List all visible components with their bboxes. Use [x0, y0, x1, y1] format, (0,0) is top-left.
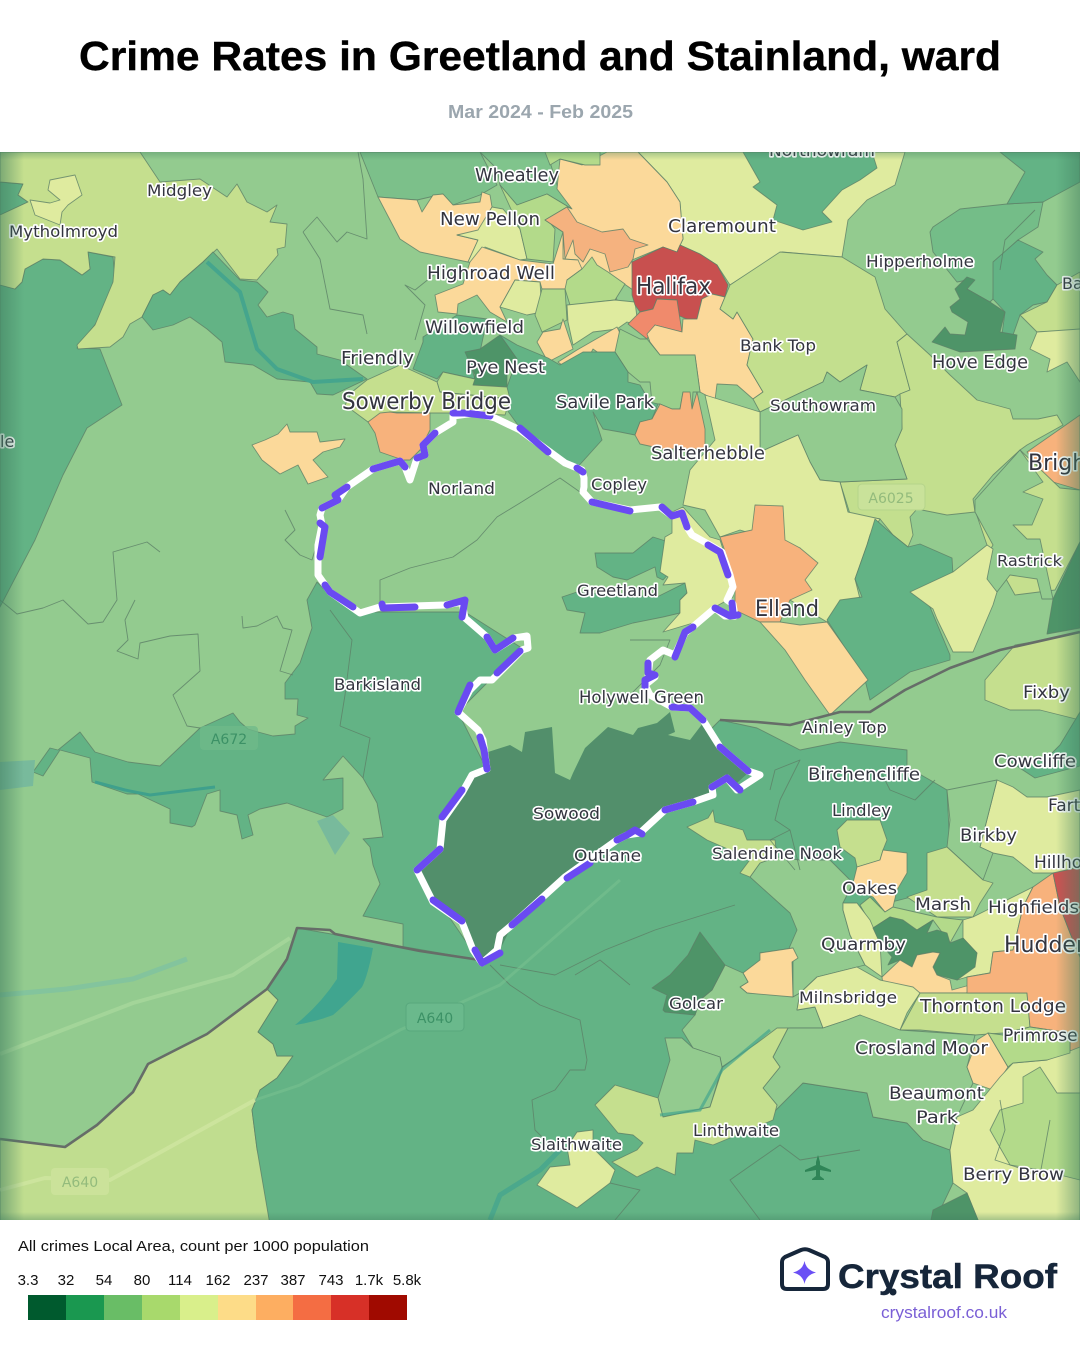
county boundary	[0, 632, 1080, 1147]
road shield: A640 centre	[406, 1003, 464, 1031]
road: A640 south-west	[0, 1100, 255, 1190]
place labels: Midgley	[147, 181, 212, 200]
region: Calder valley strip	[142, 252, 367, 395]
water: Scammonden reservoir	[295, 942, 373, 1025]
region: Elland south pale orange	[760, 622, 868, 715]
icon: airport plane	[805, 1155, 831, 1180]
region: southern darkest	[930, 1193, 980, 1225]
region: Milnsbridge pale	[797, 967, 920, 1030]
river: Colne	[490, 1150, 560, 1220]
region: Berry Brow east green	[990, 1067, 1080, 1180]
wordmark: Crystal Roof	[838, 1258, 1058, 1296]
region: central Halifax block	[535, 289, 567, 332]
region: Claremount pale yellow	[638, 152, 905, 285]
region: Pye Nest yellow-green	[437, 372, 510, 399]
place labels: Primrose	[1003, 1026, 1078, 1046]
region: Halifax salmon	[628, 299, 682, 339]
legend values: 54	[96, 1272, 112, 1289]
river: Colne east	[660, 1030, 770, 1115]
region: north of New Pellon	[360, 152, 497, 205]
place labels: Cowcliffe	[994, 752, 1076, 772]
region: Thornton Lodge pale orange	[882, 952, 970, 993]
region: north-west dark corner	[0, 182, 28, 215]
region: Barkisland and Ripponden dark	[33, 582, 525, 962]
region: Highfields pale	[957, 887, 1033, 980]
subtitle: date range: Mar 2024 - Feb 2025	[448, 101, 633, 122]
region: Northowram dark	[743, 152, 877, 230]
region: pale orange King Cross	[558, 326, 620, 364]
region: Salendine east green	[750, 857, 865, 997]
ward boundary: Greetland and Stainland	[318, 413, 760, 963]
place labels: le	[0, 432, 14, 451]
region: Highroad Well	[435, 232, 582, 322]
legend values	[18, 1272, 422, 1289]
place labels: Barkisland	[334, 675, 421, 694]
region: Berry Brow pale	[950, 1047, 1080, 1225]
region: Golcar darkest	[652, 932, 725, 1015]
legend values: 3.3	[18, 1272, 38, 1289]
road shield: A672: A672	[211, 732, 247, 748]
place labels: Pye Nest	[466, 358, 545, 378]
place labels: Beaumont	[889, 1084, 984, 1104]
region: Huddersfield east pale	[900, 993, 1030, 1035]
region: Elland north pale	[683, 395, 880, 622]
region: Rastrick pale	[910, 545, 997, 652]
place labels: Salterhebble	[651, 443, 765, 464]
place labels: Savile Park	[556, 393, 655, 413]
place labels: Birchencliffe	[808, 765, 920, 785]
place labels: Sowerby Bridge	[342, 389, 511, 415]
region: Crosland Moor pale orange	[967, 1033, 1008, 1090]
place labels: Marsh	[915, 895, 971, 915]
legend values: 1.7k	[355, 1272, 384, 1289]
river: Calder	[207, 262, 363, 382]
place labels: Slaithwaite	[531, 1135, 622, 1154]
region: Pye Nest darkest	[465, 335, 517, 387]
place labels: Fixby	[1023, 683, 1070, 703]
place labels	[0, 141, 1080, 1185]
region boundaries	[0, 152, 1050, 1220]
website url: crystalroof.co.uk	[881, 1304, 1008, 1322]
region: west pale-orange patch	[252, 424, 345, 484]
place labels: Berry Brow	[963, 1165, 1064, 1185]
region: Greetland dark north	[595, 537, 672, 580]
region: Elland east dark	[827, 519, 953, 700]
region: Greetland dark south	[562, 583, 687, 633]
region: Quarmby pale	[843, 903, 882, 977]
region: Bank Top pale orange	[647, 294, 763, 400]
place labels: Copley	[591, 475, 647, 494]
place labels: Thornton Lodge	[919, 996, 1066, 1017]
place labels: Claremount	[668, 217, 776, 237]
place labels: Golcar	[669, 994, 723, 1013]
region: Golcar green	[682, 965, 823, 1067]
icon: house with star	[782, 1249, 828, 1289]
region: Hove Edge east dark	[993, 240, 1057, 335]
place labels: Norland	[428, 479, 495, 498]
region: east yellow-green plain	[840, 334, 1063, 547]
region: Primrose green	[988, 1027, 1070, 1067]
legend title: All crimes Local Area, count per 1000 population	[18, 1238, 369, 1255]
place labels: Park	[916, 1108, 958, 1128]
water: west reservoir	[0, 760, 35, 790]
place labels: Willowfield	[425, 318, 524, 338]
road shield: A640 south-west: A640	[62, 1175, 98, 1191]
region: north Halifax pale orange	[545, 152, 683, 300]
region: Marsh south green	[860, 897, 963, 943]
region: Golcar south green	[658, 1038, 722, 1117]
legend values: 5.8k	[393, 1272, 422, 1289]
place labels: Elland	[755, 597, 819, 622]
road shield: A6025: A6025	[868, 491, 914, 507]
place labels: New Pellon	[440, 210, 540, 230]
place labels: Wheatley	[475, 165, 559, 186]
region: Bailiff Bridge yellow-green	[1020, 272, 1080, 332]
legend values: 237	[243, 1272, 269, 1289]
region: top small patches	[545, 152, 600, 165]
region: central Halifax pale	[567, 300, 638, 345]
region: Southowram	[760, 365, 907, 482]
legend values: 743	[318, 1272, 344, 1289]
region: Claremount orange	[545, 207, 648, 272]
region: Linthwaite	[595, 1028, 788, 1177]
region: central Halifax west	[565, 257, 625, 305]
place labels: Highroad Well	[427, 263, 555, 284]
place labels: Salendine Nook	[712, 844, 843, 863]
region: Huddersfield orange	[967, 873, 1080, 1053]
place labels: Oakes	[842, 879, 897, 899]
place labels: Mytholmroyd	[9, 222, 118, 241]
region: Crosland Moor green	[763, 1015, 975, 1150]
river: Ryburn	[95, 782, 215, 795]
region: Birkby green	[947, 780, 997, 880]
region: Farnley and Birkby pale	[980, 780, 1080, 873]
region: Salterhebble orange	[635, 392, 705, 449]
place labels: Halifax	[636, 274, 711, 300]
region: Oakes pale orange	[853, 850, 907, 912]
region: western dark moor	[0, 252, 122, 607]
legend	[18, 1238, 422, 1320]
legend values: 80	[134, 1272, 150, 1289]
region: Rastrick north	[975, 450, 1080, 595]
region: New Pellon pale	[457, 207, 527, 264]
region: Highroad Well pale	[500, 280, 542, 315]
place labels: Crosland Moor	[855, 1038, 989, 1059]
region: Hipperholme mid	[930, 202, 1043, 302]
region: Savile Park dark	[500, 335, 658, 470]
region: Fixby pale	[985, 632, 1080, 720]
road shield: A6025	[858, 484, 925, 510]
region: Huddersfield centre red	[1053, 867, 1080, 957]
region: Mytholmroyd pale centre	[30, 175, 82, 225]
region: Golcar pale orange	[740, 948, 798, 998]
place labels: Ainley Top	[802, 718, 887, 737]
region: Lindley yellow-green	[837, 820, 887, 867]
place labels: Rastrick	[997, 552, 1062, 570]
region: Willowfield dark	[413, 315, 487, 379]
place labels: Friendly	[341, 348, 414, 369]
legend colour scale	[28, 1295, 407, 1320]
legend values: 114	[168, 1272, 192, 1289]
place labels: Sowood	[533, 804, 600, 823]
region: Marsh yellow-green	[907, 847, 993, 917]
road shield: A640 centre: A640	[417, 1011, 453, 1027]
region: New Pellon	[378, 192, 492, 262]
region: Hove Edge darkest	[932, 277, 1017, 352]
place labels: Bank Top	[740, 336, 816, 355]
region: Cowcliffe dark	[1000, 712, 1080, 778]
region: Hove Edge east pale	[1030, 329, 1080, 382]
region: north-east dark	[1000, 152, 1080, 204]
legend values: 162	[205, 1272, 231, 1289]
region: Midgley and Mytholmroyd	[0, 152, 287, 349]
region: Salendine Nook yellow-green	[687, 810, 777, 877]
place labels: Milnsbridge	[799, 988, 897, 1007]
legend values: 32	[58, 1272, 74, 1289]
place labels: Lindley	[832, 801, 891, 820]
logo: Crystal Roof	[782, 1249, 1058, 1322]
region: Sowood darkest	[417, 712, 748, 963]
map edge fade	[0, 152, 1080, 1220]
water: stream	[0, 959, 187, 995]
region: Slaithwaite pale	[537, 1130, 615, 1208]
region: Rastrick green	[975, 450, 1053, 599]
region: Elland orange	[720, 505, 818, 622]
place labels: Hove Edge	[932, 352, 1028, 373]
place labels: Outlane	[574, 846, 641, 865]
region: south central dark	[252, 720, 953, 1225]
place labels: Greetland	[577, 581, 658, 600]
place labels: Birkby	[960, 826, 1017, 846]
region: west Halifax green	[615, 329, 700, 409]
road: M62 east	[255, 880, 620, 1100]
place labels: Highfields	[988, 898, 1079, 918]
road: M62 west	[0, 938, 290, 1054]
legend values: 387	[280, 1272, 306, 1289]
region: Quarmby darkest	[873, 917, 977, 980]
ward outline white	[318, 413, 760, 963]
place labels: Linthwaite	[693, 1121, 779, 1140]
place labels: Quarmby	[821, 935, 906, 955]
region: pale orange south of Willowfield	[537, 319, 573, 362]
region: Bank Top yellow-green	[720, 252, 910, 412]
region: Sowerby Bridge orange	[368, 412, 430, 460]
region: Brighouse orange	[1027, 415, 1080, 490]
region: West Vale pale	[660, 507, 733, 632]
region: Wheatley	[480, 152, 572, 209]
place labels: Southowram	[770, 396, 876, 415]
region: Halifax centre red	[632, 245, 728, 327]
road shield: A672	[200, 726, 258, 750]
region: south-west yellow-green	[0, 989, 293, 1225]
water: Baitings patch	[317, 815, 350, 855]
region: New Pellon east	[500, 185, 572, 262]
place labels: Holywell Green	[579, 688, 704, 707]
place labels: Northowram	[769, 141, 875, 160]
road shield: A640 south-west	[51, 1168, 109, 1195]
region: Rastrick south-east dark	[1047, 542, 1080, 634]
region: Friendly	[345, 365, 510, 422]
title: Crime Rates in Greetland and Stainland, ward	[79, 33, 1001, 79]
ward outline purple dashes	[320, 413, 748, 963]
place labels: Hipperholme	[866, 252, 974, 271]
